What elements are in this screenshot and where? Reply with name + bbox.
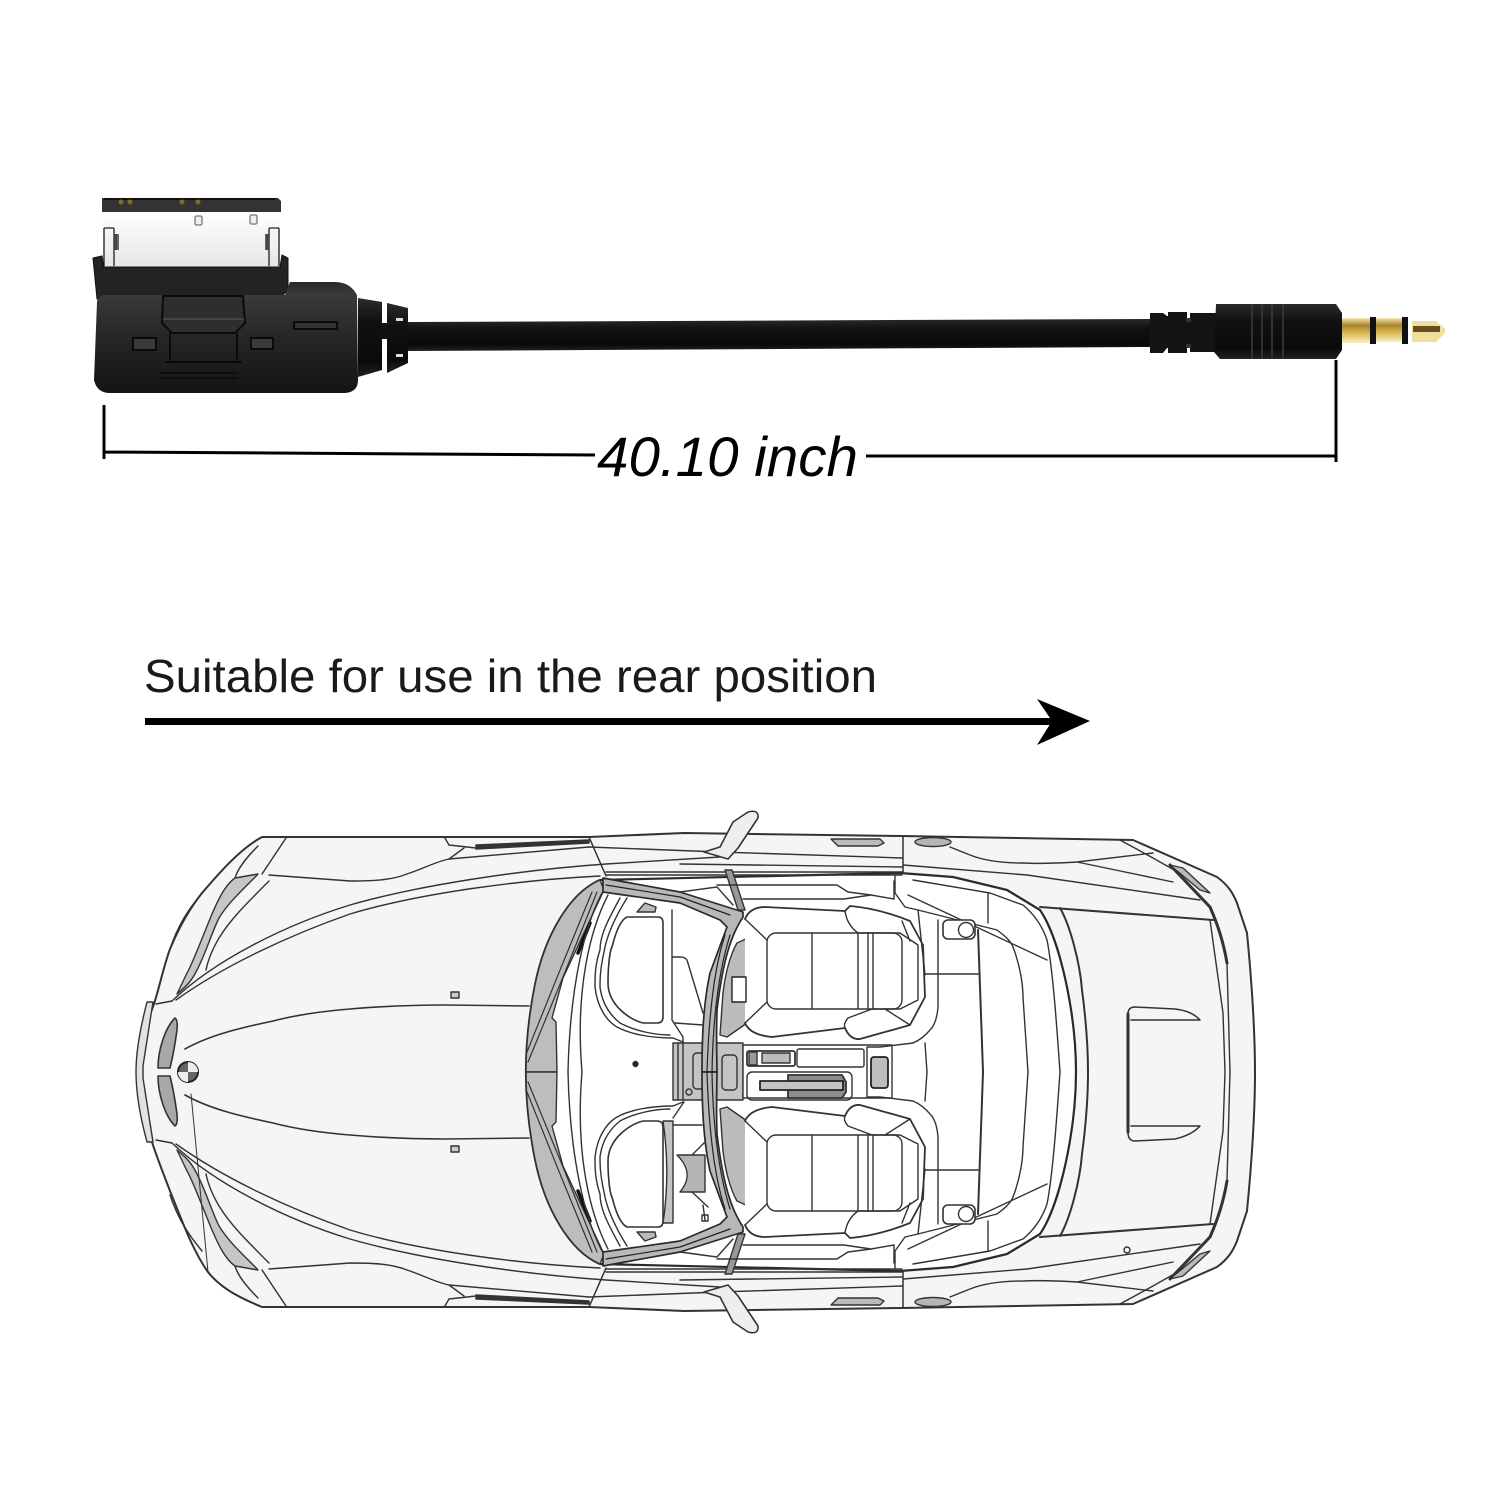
boot band bbox=[1060, 908, 1088, 1072]
seat bolsters bbox=[844, 911, 918, 1028]
hood fastener bbox=[451, 992, 459, 998]
bonnet thin line bbox=[191, 1094, 208, 1272]
pedal clip bbox=[637, 903, 656, 912]
car body outline bbox=[137, 833, 1255, 1311]
hood crease bbox=[185, 1005, 529, 1049]
upper footwell tray bbox=[672, 910, 703, 1043]
footwell outer contour bbox=[595, 898, 683, 1042]
barrel ridges bbox=[1252, 304, 1283, 359]
lower half mirrored details bbox=[156, 1072, 1230, 1333]
fender crease bbox=[269, 847, 902, 881]
fuel flap bbox=[915, 838, 951, 846]
dimension line bbox=[104, 360, 1336, 462]
car top view bbox=[136, 811, 1255, 1333]
BMW badge bbox=[178, 1062, 198, 1082]
cockpit interior bbox=[526, 873, 1076, 1271]
centre console bbox=[743, 1045, 892, 1100]
tunnel front bbox=[673, 1043, 743, 1100]
trunk handle bbox=[1128, 1007, 1200, 1141]
upper half details bbox=[156, 811, 1230, 1072]
fender dark strip bbox=[476, 840, 589, 849]
connector body bbox=[94, 282, 358, 393]
steering column trim bbox=[673, 1102, 708, 1221]
boot lid seam bbox=[1040, 907, 1213, 920]
headlight bbox=[177, 874, 258, 994]
seat ribs bbox=[745, 919, 873, 1023]
windshield arc band bbox=[526, 880, 604, 1072]
windshield frame bbox=[603, 878, 743, 1072]
cable bbox=[408, 319, 1152, 351]
wiper bbox=[578, 923, 590, 953]
rear deck panel bbox=[868, 876, 1060, 1072]
connector blade bbox=[102, 198, 281, 267]
hood character lines bbox=[172, 857, 720, 1001]
door pad switch bbox=[732, 977, 746, 1002]
door mirror bbox=[704, 811, 758, 859]
A pillar bbox=[725, 870, 745, 910]
ridged boot bbox=[1150, 312, 1216, 353]
seat bbox=[745, 906, 925, 1039]
fender vent bbox=[445, 838, 589, 859]
boot crease bbox=[903, 840, 1200, 900]
footwell bbox=[608, 917, 663, 1023]
3.5mm jack plug bbox=[1150, 304, 1445, 359]
bonnet edge panel lines bbox=[156, 838, 286, 1004]
door rail bbox=[680, 881, 894, 905]
AMI connector bbox=[93, 198, 408, 393]
boot dark edge bbox=[1170, 865, 1227, 963]
plug barrel bbox=[1214, 304, 1342, 359]
seat outline bbox=[745, 906, 925, 1039]
dimension label: 40.10 inch bbox=[597, 425, 858, 488]
arrow bbox=[145, 699, 1090, 745]
rear corner light bbox=[1170, 865, 1210, 893]
seat cushion bbox=[767, 933, 902, 1009]
door seams bbox=[589, 836, 903, 876]
heading: Suitable for use in the rear position bbox=[144, 650, 877, 702]
speaker bbox=[943, 920, 975, 939]
front grille bbox=[158, 1018, 177, 1068]
connector collar bbox=[93, 255, 288, 299]
connector clip and slots bbox=[133, 296, 337, 378]
right boot lines bbox=[1210, 920, 1230, 1072]
gold tip bbox=[1342, 317, 1445, 344]
seat back pillar bbox=[978, 930, 983, 1072]
trunk lock screw bbox=[1124, 1247, 1130, 1253]
cowl inner lines bbox=[568, 893, 608, 1072]
frame stripes bbox=[606, 885, 730, 1072]
door handle bbox=[831, 839, 884, 846]
lower footwell column bbox=[663, 1121, 673, 1223]
steering hub bbox=[677, 1155, 705, 1192]
front bumper plate bbox=[136, 1002, 153, 1142]
wiper blade bbox=[527, 892, 597, 1062]
gear knob dot bbox=[633, 1062, 638, 1066]
strain relief bbox=[358, 298, 408, 377]
door pad bbox=[720, 937, 753, 1037]
